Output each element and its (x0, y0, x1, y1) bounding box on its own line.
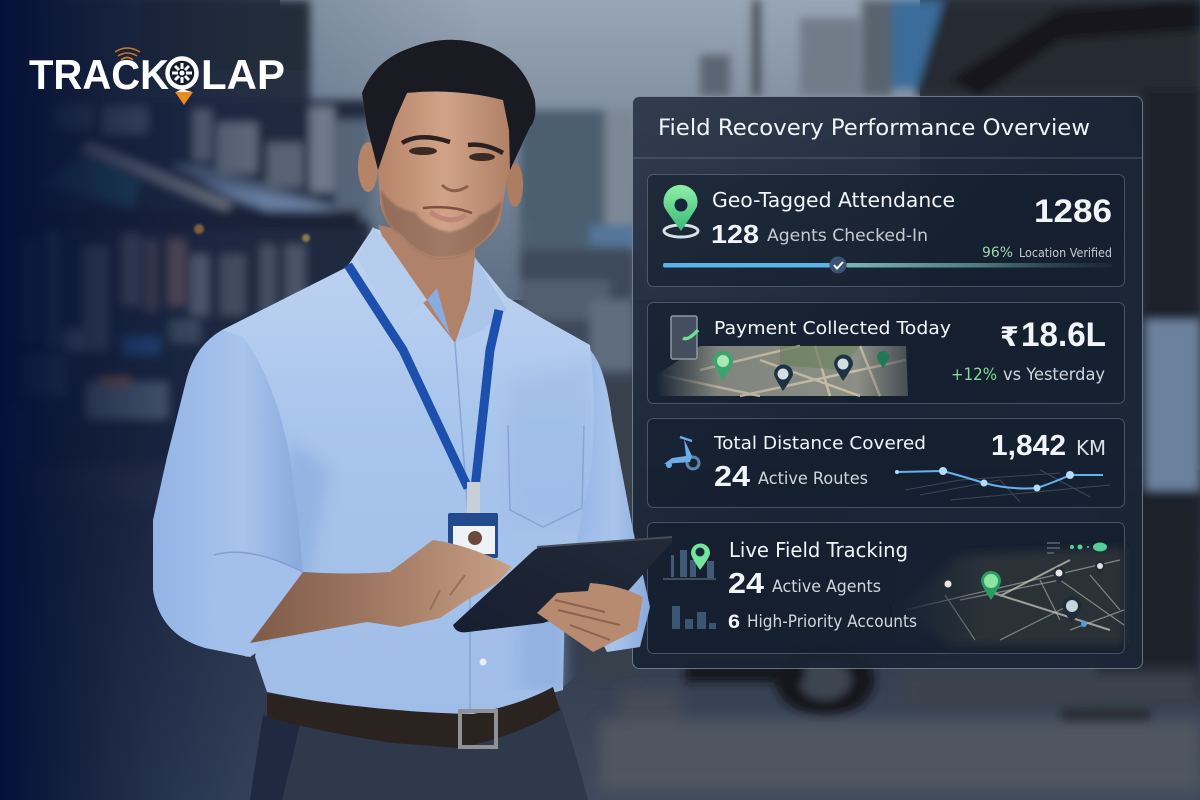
shirt shading (289, 372, 578, 689)
lanyard (348, 265, 499, 488)
rolled cuff (210, 552, 303, 657)
belt (267, 687, 560, 748)
card: geo-tagged attendance: Location Verified (1019, 246, 1112, 260)
progress bar (663, 256, 1112, 274)
map pins (942, 561, 1105, 627)
card: payment collected today: vs Yesterday (1003, 365, 1105, 385)
id badge (448, 482, 498, 558)
card: live field tracking (648, 522, 1124, 654)
card: payment collected today (648, 302, 1124, 404)
card: geo-tagged attendance: Geo-Tagged Attendance (712, 188, 955, 212)
status dots (1070, 542, 1107, 552)
card: geo-tagged attendance: 1286 (1034, 193, 1112, 229)
map: live tracking (895, 542, 1124, 645)
signal arcs (115, 48, 140, 60)
right sleeve (560, 345, 650, 652)
map thumbnail (655, 346, 908, 396)
card: total distance covered: Total Distance Covered (713, 433, 926, 454)
neck (378, 225, 490, 343)
belt buckle (460, 711, 496, 747)
head (378, 90, 510, 258)
icon: location pin (664, 185, 698, 237)
card: total distance covered (648, 418, 1124, 508)
card: geo-tagged attendance: 96% (982, 245, 1013, 261)
card: geo-tagged attendance (648, 174, 1124, 286)
person: field agent holding a tablet (153, 40, 672, 800)
card: live field tracking: Active Agents (772, 577, 881, 597)
card: live field tracking: 6 (728, 612, 740, 633)
ground blur (0, 465, 1200, 790)
card: live field tracking: High-Priority Accounts (747, 612, 917, 631)
route chart (895, 467, 1110, 502)
panel: field recovery performance overview (632, 96, 1142, 668)
card: total distance covered: KM (1076, 436, 1106, 460)
icon: scooter (664, 437, 699, 469)
left forearm and hand (250, 540, 512, 643)
icon: city with pin (663, 544, 716, 579)
orange lamp bokeh (194, 224, 204, 234)
eyes (409, 147, 495, 161)
left market stalls (0, 0, 370, 480)
card: total distance covered: 24 (714, 461, 750, 493)
shirt placket and pocket (455, 343, 584, 712)
card: payment collected today: Payment Collected Today (714, 318, 951, 339)
card: geo-tagged attendance: 128 (711, 219, 759, 249)
map pins (713, 351, 889, 391)
nose and mouth (423, 185, 472, 220)
eyebrows (402, 137, 503, 153)
card: geo-tagged attendance: Agents Checked-In (767, 226, 928, 246)
trousers (250, 705, 588, 800)
hair (362, 40, 535, 170)
card: total distance covered: Active Routes (758, 469, 868, 488)
card: payment collected today: +12% (951, 365, 997, 385)
card: live field tracking: Live Field Tracking (729, 538, 908, 562)
trackolap logo: LAP (201, 51, 285, 98)
collar (357, 227, 427, 327)
trackolap logo: TRACK (29, 51, 169, 98)
tablet (453, 537, 672, 632)
card: live field tracking: 24 (728, 568, 764, 600)
stubble (381, 190, 502, 258)
ears (358, 142, 378, 192)
icon: phone with check (671, 316, 698, 359)
right hand (537, 583, 643, 652)
card: total distance covered: 1,842 (991, 430, 1066, 462)
left sleeve (153, 330, 303, 657)
card: payment collected today: 18.6L (1021, 316, 1106, 354)
icon: bar chart (672, 606, 716, 629)
shirt torso (222, 228, 594, 716)
trackolap logo (29, 48, 285, 105)
panel heading: Field Recovery Performance Overview (658, 116, 1090, 141)
wheel icon (168, 58, 196, 105)
far buildings and street (520, 0, 1200, 725)
card: payment collected today: ₹ (1000, 322, 1019, 353)
